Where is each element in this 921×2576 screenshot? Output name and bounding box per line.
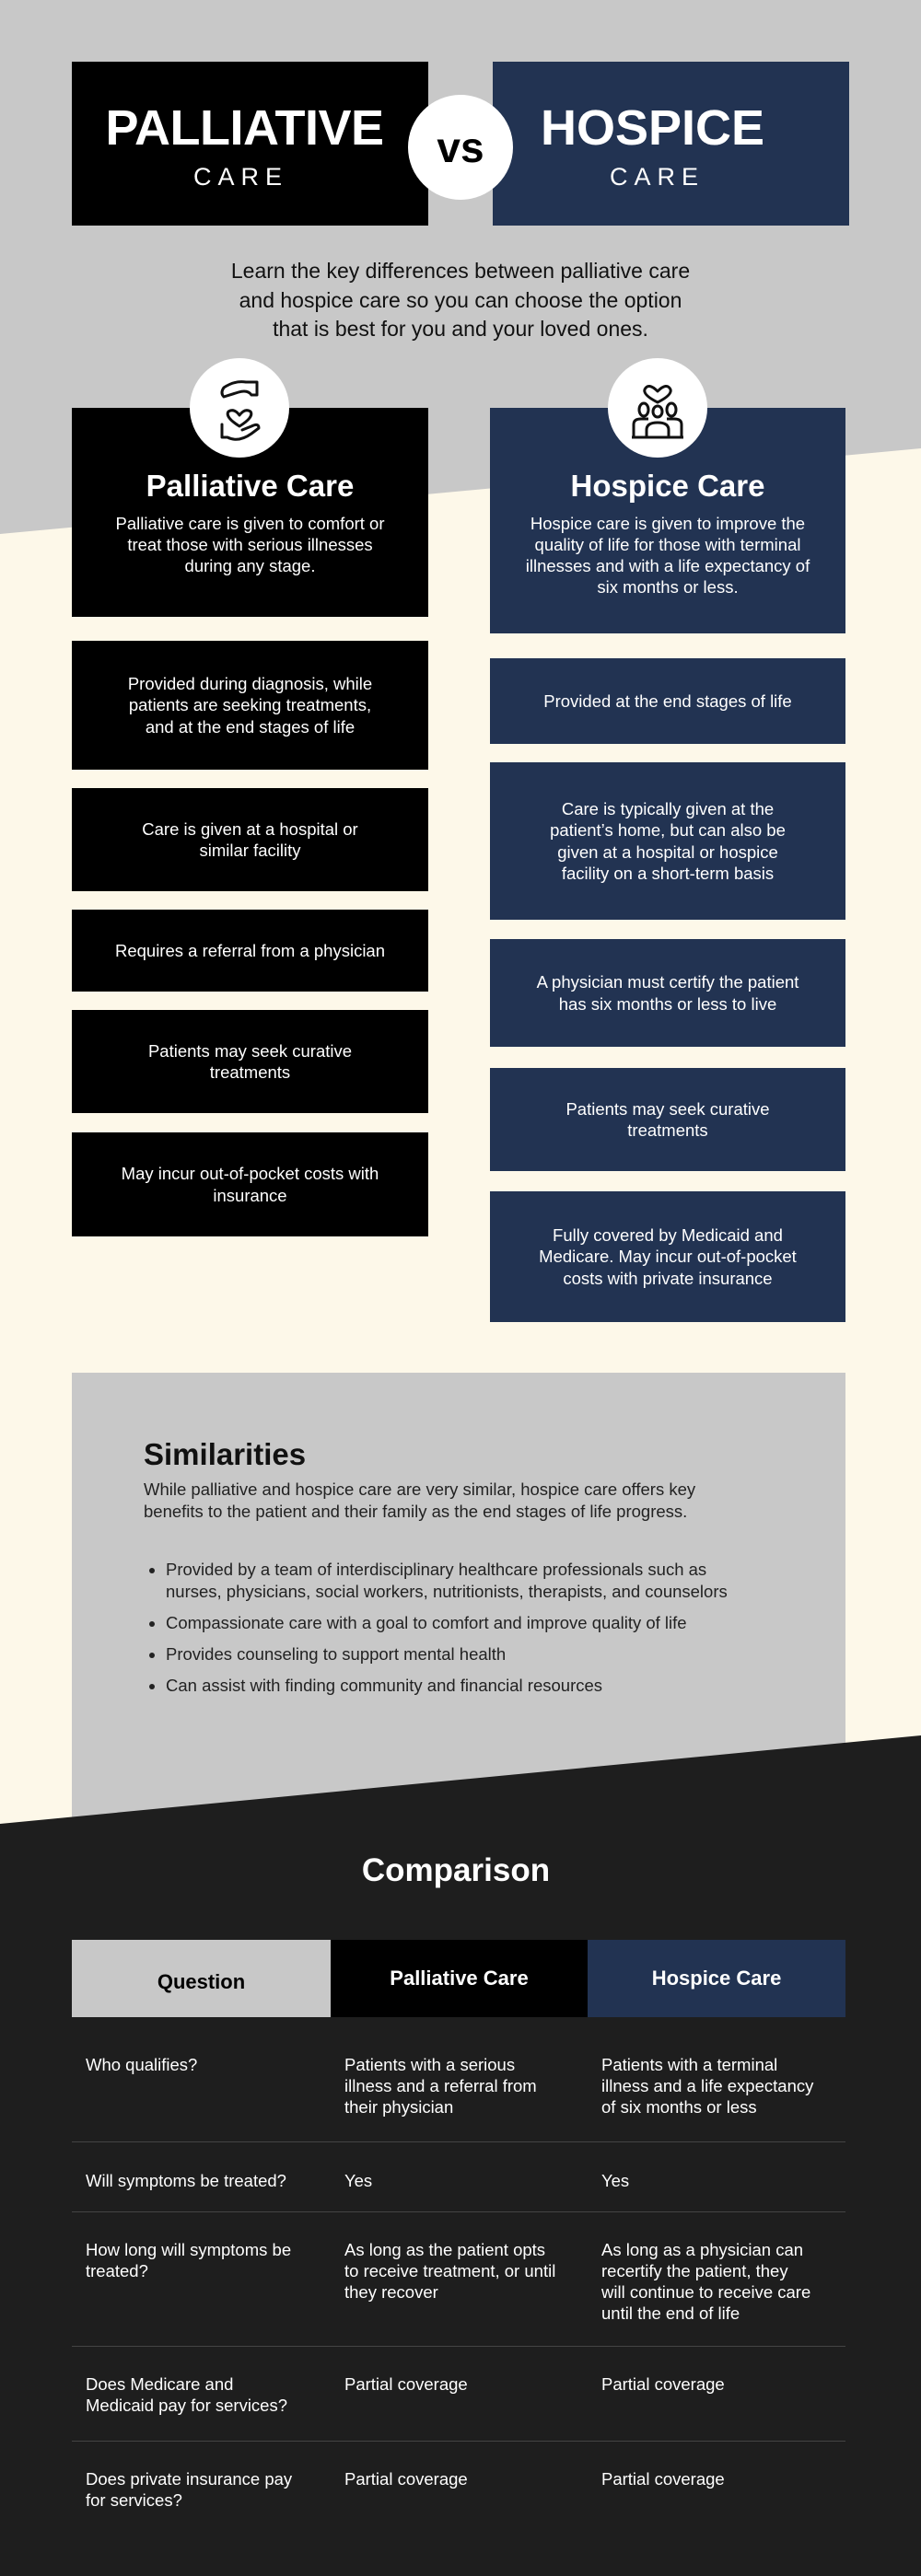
vs badge: vs	[437, 123, 484, 171]
box: curative: treatments	[210, 1062, 290, 1082]
panel: hospice card: Hospice Care	[571, 469, 764, 503]
box: curative: Patients may seek curative	[148, 1040, 352, 1061]
box: diagnosis	[72, 641, 428, 770]
bullet list: nurses, physicians, social workers, nutritionists, therapists, and counselors	[166, 1582, 728, 1601]
icon: hands with heart	[190, 358, 289, 458]
box: referral: Requires a referral from a physician	[115, 941, 385, 960]
table rows: Patients with a serious	[344, 2055, 515, 2074]
box: curative: Patients may seek curative	[565, 1099, 770, 1118]
box: curative: treatments	[627, 1120, 708, 1140]
palliative feature boxes	[72, 641, 428, 1236]
box: end stages: Provided at the end stages of life	[543, 691, 792, 711]
box: curative	[490, 1068, 845, 1171]
panel: palliative card: Palliative care is given to comfort or	[115, 514, 385, 533]
table rows: Yes	[601, 2171, 629, 2190]
box: hospital	[72, 788, 428, 891]
bullet list: Provides counseling to support mental health	[166, 1644, 506, 1664]
table rows: their physician	[344, 2097, 453, 2117]
box: diagnosis: Provided during diagnosis, while	[128, 674, 372, 693]
box: costs	[72, 1132, 428, 1236]
box: home: given at a hospital or hospice	[557, 841, 778, 862]
box: diagnosis: patients are seeking treatments,	[129, 695, 371, 714]
box: end stages	[490, 658, 845, 744]
panel: hospice card	[490, 408, 845, 633]
box: home: patient’s home, but can also be	[550, 820, 786, 840]
bullet list: Provided by a team of interdisciplinary healthcare professionals such as	[166, 1560, 706, 1579]
box: coverage: costs with private insurance	[563, 1269, 773, 1288]
panel: hospice card: Hospice care is given to improve the	[530, 514, 805, 533]
heading: comparison: Comparison	[362, 1852, 550, 1888]
header: hospice care	[493, 62, 849, 226]
table rows: for services?	[86, 2490, 182, 2510]
table rows: Partial coverage	[344, 2469, 468, 2489]
table rows: As long as the patient opts	[344, 2240, 545, 2259]
table header	[72, 1940, 845, 2017]
header: hospice care: CARE	[610, 163, 705, 191]
table rows: will continue to receive care	[601, 2282, 810, 2302]
box: home: facility on a short-term basis	[562, 864, 774, 883]
description: benefits to the patient and their family as the end stages of life progress.	[144, 1502, 687, 1521]
box: home	[490, 762, 845, 920]
table rows: Partial coverage	[601, 2469, 725, 2489]
header: palliative care: PALLIATIVE	[105, 100, 383, 156]
panel: palliative card: during any stage.	[185, 556, 315, 575]
intro text: and hospice care so you can choose the option	[239, 287, 682, 311]
intro text: that is best for you and your loved ones.	[273, 317, 648, 341]
table rows	[86, 2055, 814, 2510]
table rows: recertify the patient, they	[601, 2261, 788, 2280]
table rows: treated?	[86, 2261, 148, 2280]
panel: palliative card	[72, 408, 428, 617]
table rows: Medicaid pay for services?	[86, 2396, 287, 2415]
table rows: Who qualifies?	[86, 2055, 197, 2074]
table rows: Does Medicare and	[86, 2374, 233, 2394]
table rows: As long as a physician can	[601, 2240, 803, 2259]
description: While palliative and hospice care are very similar, hospice care offers key	[144, 1479, 695, 1499]
box: costs: insurance	[213, 1186, 287, 1204]
table rows: Yes	[344, 2171, 372, 2190]
bullet list	[149, 1560, 728, 1695]
intro text: Learn the key differences between palliative care	[231, 259, 690, 283]
heading: Similarities	[144, 1437, 306, 1471]
box: costs: May incur out-of-pocket costs with	[122, 1164, 379, 1183]
box: home: Care is typically given at the	[562, 799, 774, 818]
table: comparison	[72, 1940, 845, 2017]
panel: palliative card: treat those with serious illnesses	[127, 535, 373, 554]
box: certify: has six months or less to live	[559, 994, 776, 1013]
table rows: of six months or less	[601, 2097, 757, 2117]
panel: palliative card: Palliative Care	[146, 469, 354, 503]
table rows: illness and a life expectancy	[601, 2076, 813, 2095]
description	[144, 1479, 695, 1521]
table header: Hospice Care	[652, 1967, 781, 1990]
icon: family with heart	[608, 358, 707, 458]
table rows: until the end of life	[601, 2303, 740, 2323]
table rows: to receive treatment, or until	[344, 2261, 555, 2280]
bullet list: Can assist with finding community and financial resources	[166, 1676, 602, 1695]
table header: Question	[157, 1970, 245, 1993]
header: hospice care: HOSPICE	[541, 100, 764, 156]
header: palliative care	[72, 62, 428, 226]
intro text	[231, 259, 690, 341]
table header: Palliative Care	[390, 1967, 529, 1990]
table rows: they recover	[344, 2282, 438, 2302]
panel: hospice card: six months or less.	[597, 577, 739, 597]
box: hospital: Care is given at a hospital or	[142, 819, 358, 838]
table rows: Does private insurance pay	[86, 2469, 292, 2489]
box: referral	[72, 910, 428, 992]
panel: hospice card: illnesses and with a life expectancy of	[526, 556, 810, 575]
table rows: Partial coverage	[344, 2374, 468, 2394]
vs badge	[408, 95, 513, 200]
box: hospital: similar facility	[199, 841, 300, 860]
box: curative	[72, 1010, 428, 1113]
bullet list: Compassionate care with a goal to comfort and improve quality of life	[166, 1613, 687, 1632]
hospice feature boxes	[490, 658, 845, 1322]
box: coverage: Medicare. May incur out-of-pocket	[539, 1247, 797, 1266]
table rows: Patients with a terminal	[601, 2055, 777, 2074]
panel: hospice card: quality of life for those with terminal	[535, 535, 800, 554]
table rows: illness and a referral from	[344, 2076, 537, 2095]
box: certify: A physician must certify the patient	[537, 972, 799, 992]
box: coverage: Fully covered by Medicaid and	[553, 1225, 783, 1245]
header: palliative care: CARE	[193, 163, 288, 191]
panel: similarities	[144, 1437, 728, 1695]
table rows: Will symptoms be treated?	[86, 2171, 286, 2190]
table rows: Partial coverage	[601, 2374, 725, 2394]
box: certify	[490, 939, 845, 1047]
box: coverage	[490, 1191, 845, 1322]
table rows: How long will symptoms be	[86, 2240, 291, 2259]
box: diagnosis: and at the end stages of life	[146, 717, 355, 737]
